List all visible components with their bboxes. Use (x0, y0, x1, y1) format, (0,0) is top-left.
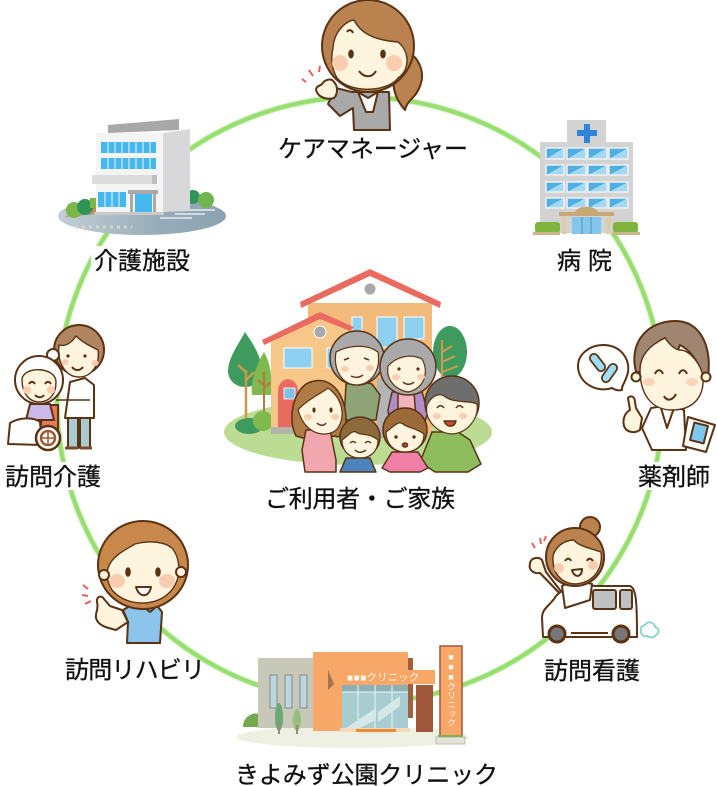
father (420, 376, 481, 472)
ground (224, 399, 492, 465)
label: users and family: ご利用者・ご家族 (265, 486, 455, 513)
clinic building (236, 646, 468, 748)
visiting rehabilitation figure (82, 521, 188, 643)
label: care facility: 介護施設 (94, 248, 190, 275)
label: pharmacist: 薬剤師 (638, 464, 710, 491)
care facility building (58, 119, 226, 235)
label: hospital: 病 院 (557, 248, 612, 275)
lower house (262, 312, 391, 438)
label: visiting care: 訪問介護 (5, 464, 101, 491)
boy (340, 417, 380, 472)
speech bubble with pills (578, 345, 628, 390)
label: care manager: ケアマネージャー (278, 136, 468, 163)
upper house (300, 269, 441, 433)
care manager figure (302, 0, 422, 130)
pharmacist figure (578, 321, 715, 452)
hospital building (533, 120, 640, 235)
grandfather (330, 331, 384, 420)
visiting caregiver with wheelchair (8, 325, 104, 450)
label: visiting nursing: 訪問看護 (544, 658, 640, 685)
label: visiting rehabilitation: 訪問リハビリ (65, 657, 205, 684)
mother (292, 380, 346, 472)
canopy sign text: ■■■クリニック (347, 672, 419, 684)
pillar sign text: ■■■クリニック (446, 652, 456, 727)
visiting nurse in car (530, 517, 659, 642)
trees (228, 326, 467, 434)
users and family house scene (224, 269, 492, 472)
ring connecting all care providers (57, 97, 663, 703)
grandmother (380, 339, 436, 425)
girl (382, 408, 428, 472)
